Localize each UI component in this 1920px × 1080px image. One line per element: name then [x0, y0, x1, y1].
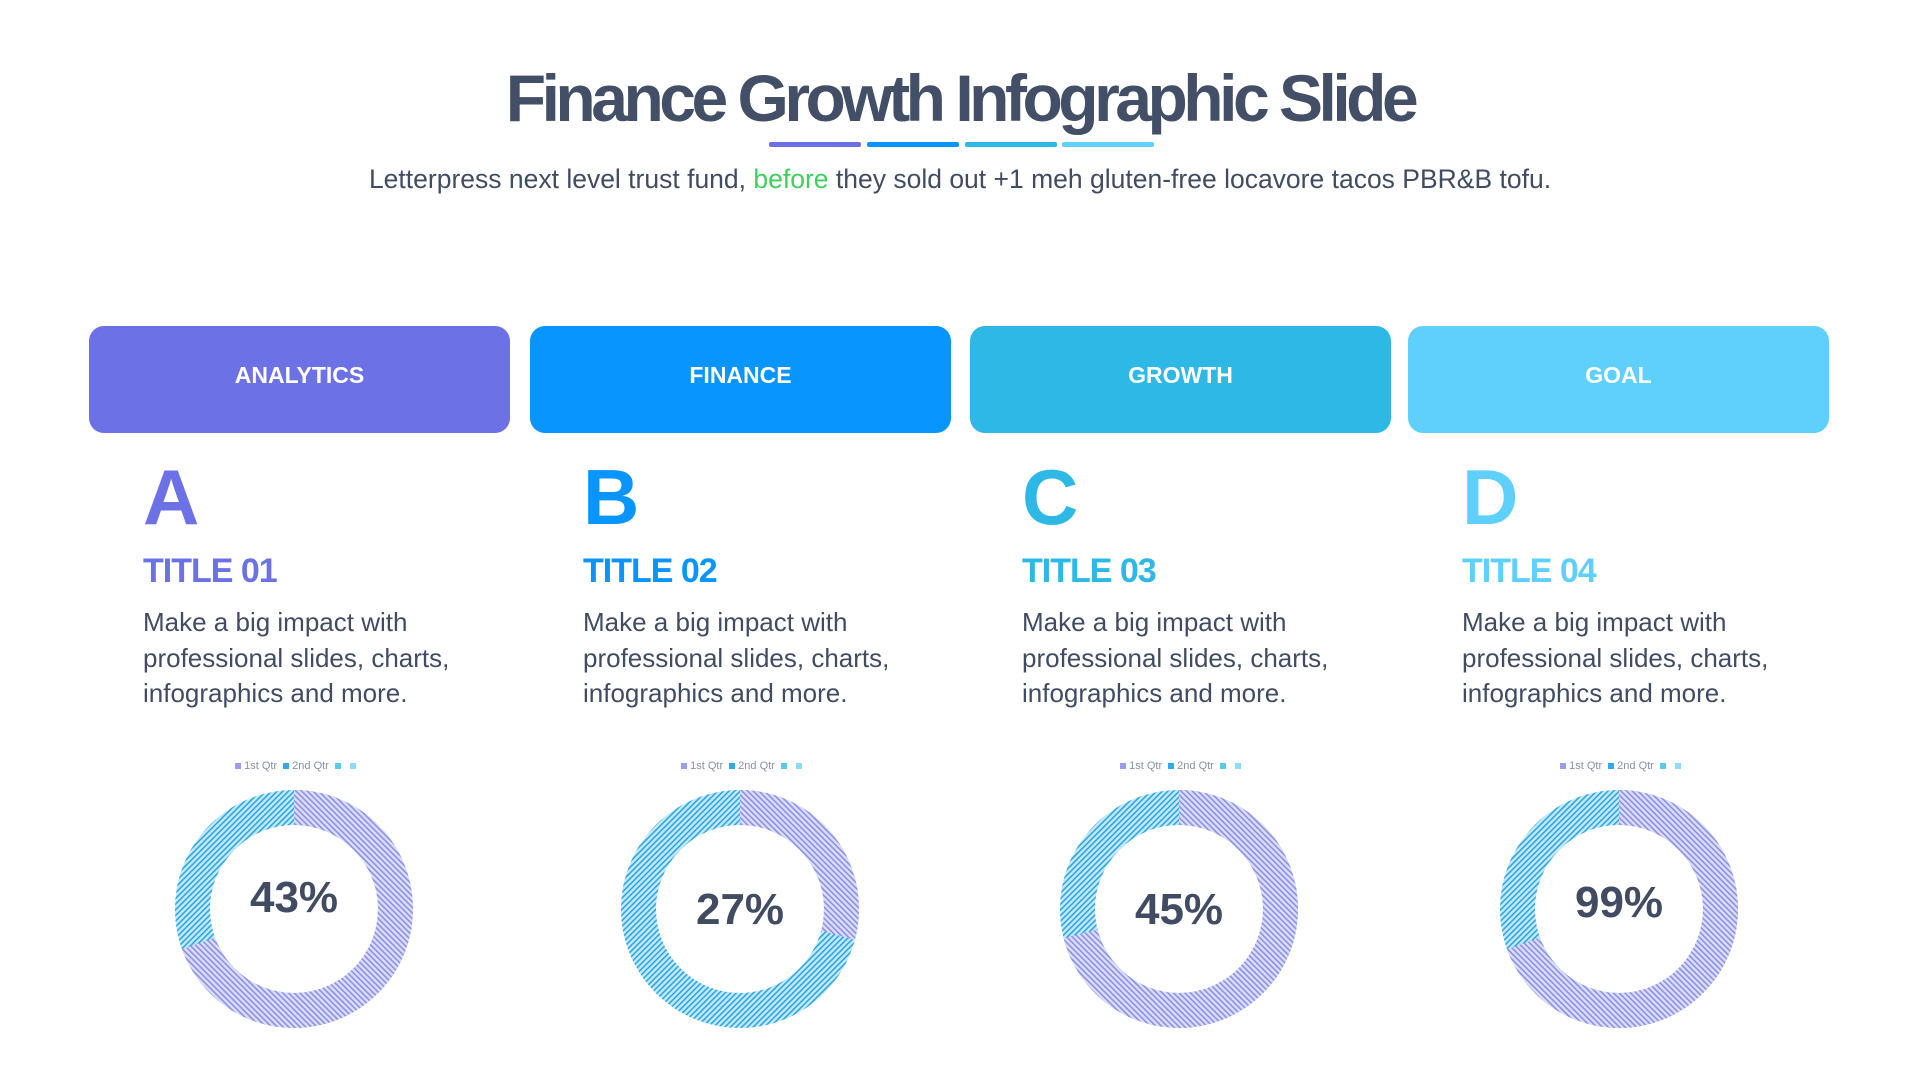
- header: goal: [1408, 326, 1829, 433]
- letter C: C: [1022, 453, 1078, 541]
- header: analytics: [89, 326, 510, 433]
- title underline bars: [769, 142, 1154, 147]
- title 01: TITLE 01: [143, 552, 277, 590]
- letter B: B: [583, 453, 639, 541]
- column C: [1022, 453, 1328, 708]
- donut B: [638, 808, 842, 1010]
- column D: [1462, 453, 1768, 708]
- body text C: Make a big impact with professional slides, charts, infographics and more.: [1022, 607, 1328, 708]
- body text A: Make a big impact with professional slides, charts, infographics and more.: [143, 607, 449, 708]
- letter A: A: [143, 453, 199, 541]
- legend D: 1st Qtr 2nd Qtr: [1569, 760, 1654, 772]
- donut C: [1078, 808, 1280, 1010]
- header: finance: FINANCE: [689, 362, 792, 388]
- header: analytics: ANALYTICS: [235, 362, 364, 388]
- letter D: D: [1462, 453, 1518, 541]
- subtitle: Letterpress next level trust fund, before they sold out +1 meh gluten-free locavore tacos PBR&B tofu.: [369, 164, 1551, 194]
- column B: [583, 453, 889, 708]
- donut A: 43%: [250, 873, 338, 922]
- donut B: 27%: [696, 885, 784, 934]
- column A: [143, 453, 449, 708]
- legend C: 1st Qtr 2nd Qtr: [1129, 760, 1214, 772]
- header: growth: GROWTH: [1128, 362, 1233, 388]
- header: finance: [530, 326, 951, 433]
- donut D: [1518, 808, 1720, 1010]
- donut C: 45%: [1135, 885, 1223, 934]
- donut A: [192, 808, 396, 1010]
- title 04: TITLE 04: [1462, 552, 1596, 590]
- body text B: Make a big impact with professional slides, charts, infographics and more.: [583, 607, 889, 708]
- title 03: TITLE 03: [1022, 552, 1156, 590]
- legend B: 1st Qtr 2nd Qtr: [690, 760, 775, 772]
- legend A: 1st Qtr 2nd Qtr: [244, 760, 329, 772]
- header: goal: GOAL: [1585, 362, 1652, 388]
- title 02: TITLE 02: [583, 552, 717, 590]
- title: Finance Growth Infographic Slide: [506, 61, 1414, 135]
- donut D: 99%: [1575, 878, 1663, 927]
- header: growth: [970, 326, 1391, 433]
- body text D: Make a big impact with professional slides, charts, infographics and more.: [1462, 607, 1768, 708]
